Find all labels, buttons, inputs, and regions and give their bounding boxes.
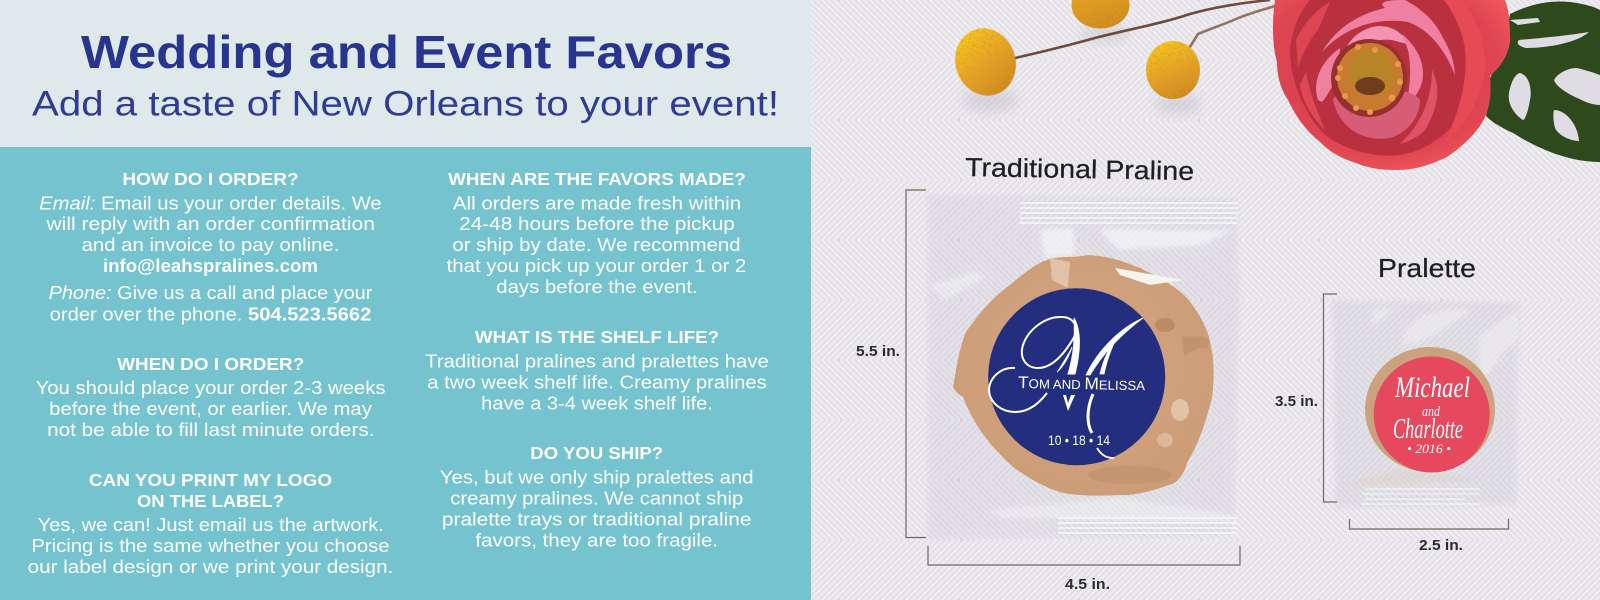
text block: when are the favors made: 24-48 hours before the pickup xyxy=(459,213,735,234)
text block: can you print my logo: ON THE LABEL? xyxy=(137,491,284,511)
text block: can you print my logo: Yes, we can! Just email us the artwork. xyxy=(38,514,384,535)
text block: do you ship: DO YOU SHIP? xyxy=(530,443,663,463)
dimension: pralette width bracket xyxy=(1350,519,1508,529)
icon: navy monogram label: 10 • 18 • 14 xyxy=(1048,432,1110,448)
dimension: traditional height bracket xyxy=(906,190,926,538)
text block: when are the favors made: days before the event. xyxy=(496,276,698,297)
label: 5.5 in.: 5.5 in. xyxy=(856,343,900,360)
text block: how do I order: will reply with an order confirmation xyxy=(45,213,375,234)
text block: do you ship: Yes, but we only ship pralettes and xyxy=(440,466,754,487)
text block: how do I order: Phone: Give us a call and place your xyxy=(49,282,372,303)
text block: do you ship: pralette trays or traditional praline xyxy=(442,508,752,529)
text block: what is the shelf life xyxy=(425,327,769,413)
heading: Pralette: Pralette xyxy=(1378,253,1476,283)
subtitle: Add a taste of New Orleans to your event! xyxy=(32,84,779,124)
icon: monstera leaf xyxy=(1486,2,1600,162)
text block: when do I order: WHEN DO I ORDER? xyxy=(117,354,304,374)
label: 3.5 in.: 3.5 in. xyxy=(1275,393,1318,410)
panel: photo background xyxy=(811,0,1600,600)
text block: do you ship xyxy=(440,443,754,550)
text block: can you print my logo: CAN YOU PRINT MY LOGO xyxy=(89,470,332,490)
panel: FAQ xyxy=(0,147,811,600)
label: 4.5 in.: 4.5 in. xyxy=(1065,576,1110,593)
label: 2.5 in.: 2.5 in. xyxy=(1419,537,1463,554)
text block: what is the shelf life: WHAT IS THE SHELF LIFE? xyxy=(475,327,719,347)
icon: coral name label: • 2016 • xyxy=(1407,441,1451,456)
icon: coral name label: Michael xyxy=(1394,371,1470,404)
dimension: traditional width bracket xyxy=(928,546,1240,565)
text block: when are the favors made: or ship by date. We recommend xyxy=(452,234,741,255)
icon: coral name label xyxy=(1374,356,1490,472)
text block: how do I order: and an invoice to pay online. xyxy=(82,234,339,255)
title: Wedding and Event Favors xyxy=(81,26,732,78)
icon: coral name label: Charlotte xyxy=(1393,414,1463,445)
icon: navy monogram label: TOM AND MELISSA xyxy=(1018,373,1146,394)
text block: what is the shelf life: Traditional pralines and pralettes have xyxy=(425,350,769,371)
icon: pralette bag xyxy=(1332,300,1520,508)
text block: how do I order: info@leahspralines.com xyxy=(103,255,318,276)
heading: Traditional Praline: Traditional Praline xyxy=(965,152,1194,186)
text block: how do I order xyxy=(39,169,382,324)
text block: when do I order: not be able to fill last minute orders. xyxy=(47,419,374,440)
icon: pink ranunculus flower xyxy=(1273,0,1510,170)
icon: navy monogram label xyxy=(988,288,1165,465)
text block: when are the favors made: WHEN ARE THE FAVORS MADE? xyxy=(448,169,746,189)
text block: when are the favors made: All orders are made fresh within xyxy=(453,192,741,213)
text block: when do I order: You should place your order 2-3 weeks xyxy=(36,377,385,398)
icon: praline candy xyxy=(953,255,1214,496)
text block: can you print my logo: Pricing is the same whether you choose xyxy=(31,535,390,556)
icon: billy ball flowers and stems xyxy=(946,0,1275,114)
text block: when do I order: before the event, or earlier. We may xyxy=(49,398,373,419)
text block: when do I order xyxy=(36,354,385,440)
text block: when are the favors made xyxy=(447,169,746,297)
text block: what is the shelf life: a two week shelf life. Creamy pralines xyxy=(427,371,767,392)
text block: how do I order: Email: Email us your order details. We xyxy=(39,192,382,213)
dimension: pralette height bracket xyxy=(1324,294,1337,502)
icon: pralette candy xyxy=(1365,347,1495,472)
text block: what is the shelf life: have a 3-4 week shelf life. xyxy=(481,392,713,413)
icon: coral name label: and xyxy=(1422,404,1440,420)
text block: do you ship: favors, they are too fragile. xyxy=(475,529,718,550)
text block: how do I order: order over the phone. 504.523.5662 xyxy=(50,303,371,324)
icon: traditional praline bag xyxy=(927,195,1240,540)
text block: how do I order: HOW DO I ORDER? xyxy=(122,169,299,189)
panel: title header xyxy=(0,0,811,147)
text block: can you print my logo xyxy=(28,470,393,577)
text block: can you print my logo: our label design or we print your design. xyxy=(28,556,393,577)
text block: when are the favors made: that you pick up your order 1 or 2 xyxy=(447,255,746,276)
text block: do you ship: creamy pralines. We cannot ship xyxy=(450,487,743,508)
